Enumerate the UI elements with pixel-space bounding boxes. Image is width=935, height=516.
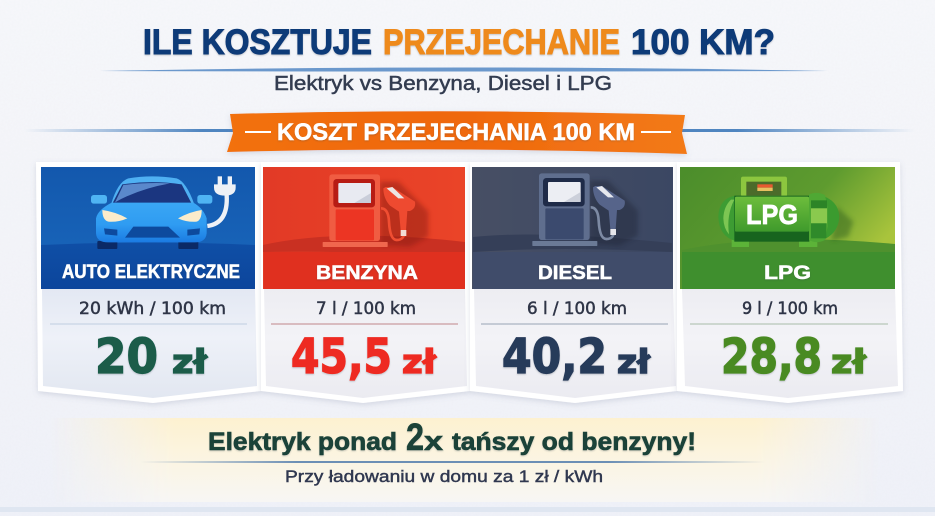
card header: AUTO ELEKTRYCZNE: [62, 262, 240, 283]
icon: lpg tank: [718, 177, 853, 247]
card header: [263, 167, 465, 289]
card header: [41, 167, 255, 289]
cost: zł: [831, 342, 867, 381]
headline: Elektryk ponad: [208, 428, 397, 456]
panel: benzyna: [261, 162, 470, 403]
headline: x: [424, 426, 443, 456]
consumption: 9 l / 100 km: [742, 299, 838, 319]
panel: lpg: [677, 162, 903, 403]
card header: LPG: [764, 263, 811, 284]
cost: 28,8: [721, 329, 822, 385]
title: 100 KM?: [631, 23, 775, 62]
section banner: KOSZT PRZEJECHANIA 100 KM: [277, 119, 635, 146]
icon: diesel pump: [532, 173, 638, 246]
icon: electric car: [91, 176, 236, 249]
panel: auto elektryczne: [36, 162, 261, 403]
card body: [42, 289, 257, 398]
cost: 40,2: [502, 329, 607, 385]
card header: [680, 167, 895, 289]
card body: [474, 289, 676, 398]
subtitle: Elektryk vs Benzyna, Diesel i LPG: [274, 73, 612, 95]
cost: 45,5: [291, 329, 392, 385]
headline: 2: [406, 417, 424, 459]
card body: [682, 289, 898, 398]
title: PRZEJECHANIE: [383, 23, 620, 62]
callout: summary: [50, 417, 880, 502]
card header: BENZYNA: [316, 263, 418, 284]
cost: zł: [172, 342, 208, 381]
card body: [264, 289, 467, 398]
card header: [472, 167, 673, 289]
consumption: 20 kWh / 100 km: [79, 299, 226, 319]
cost: zł: [617, 342, 651, 381]
headline: tańszy od benzyny!: [452, 428, 696, 456]
section banner: [227, 111, 687, 154]
panel: diesel: [470, 162, 677, 403]
footnote: Przy ładowaniu w domu za 1 zł / kWh: [285, 467, 603, 486]
cost: zł: [402, 342, 437, 381]
title: ILE KOSZTUJE: [143, 23, 372, 62]
cost: 20: [95, 329, 158, 385]
consumption: 6 l / 100 km: [527, 299, 627, 319]
icon: petrol pump: [323, 174, 428, 247]
consumption: 7 l / 100 km: [316, 299, 416, 319]
icon: lpg tank: LPG: [746, 199, 798, 230]
card header: DIESEL: [538, 263, 612, 284]
